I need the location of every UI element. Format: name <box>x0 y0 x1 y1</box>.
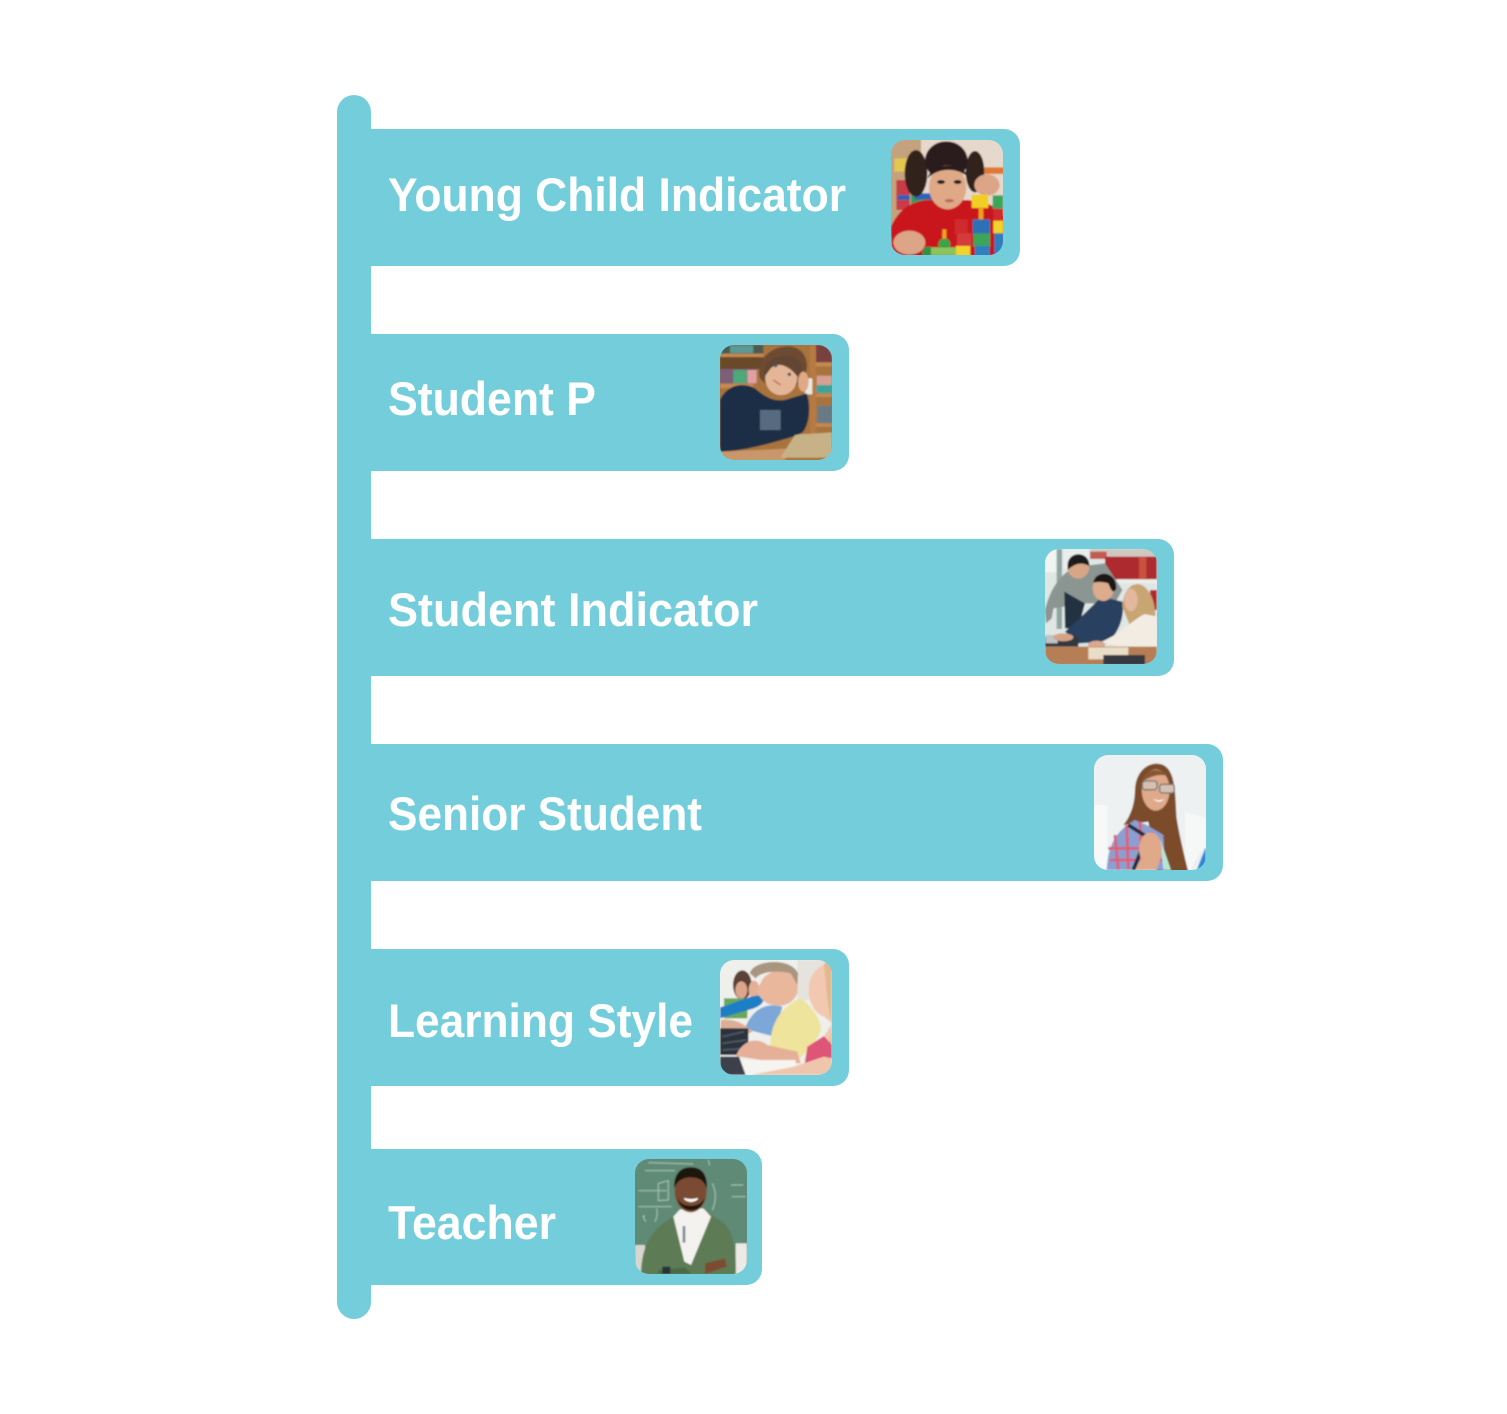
bar <box>365 129 1020 266</box>
bar <box>365 744 1223 881</box>
photo: child with blocks <box>891 140 1003 255</box>
heading: Student P <box>388 372 596 425</box>
panel: Student P <box>365 334 849 471</box>
photo: three students at table <box>1045 549 1157 664</box>
bar <box>365 949 849 1086</box>
heading: Student Indicator <box>388 583 758 636</box>
panel: Learning Style <box>365 949 849 1086</box>
infographic <box>337 95 1223 1319</box>
bar <box>365 539 1174 676</box>
photo: boy in library <box>720 345 832 460</box>
heading: Teacher <box>388 1196 556 1249</box>
panel: Student Indicator <box>365 539 1174 676</box>
vertical spine <box>337 95 371 1319</box>
photo: smiling student with glasses <box>1094 755 1206 870</box>
heading: Young Child Indicator <box>388 168 846 221</box>
panel: Young Child Indicator <box>365 129 1020 266</box>
bar <box>365 334 849 471</box>
panel: Senior Student <box>365 744 1223 881</box>
photo: teacher at chalkboard <box>635 1159 747 1274</box>
heading: Senior Student <box>388 787 702 840</box>
bar <box>365 1149 762 1285</box>
photo: children at laptops <box>720 960 832 1075</box>
heading: Learning Style <box>388 994 693 1047</box>
panel: Teacher <box>365 1149 762 1285</box>
